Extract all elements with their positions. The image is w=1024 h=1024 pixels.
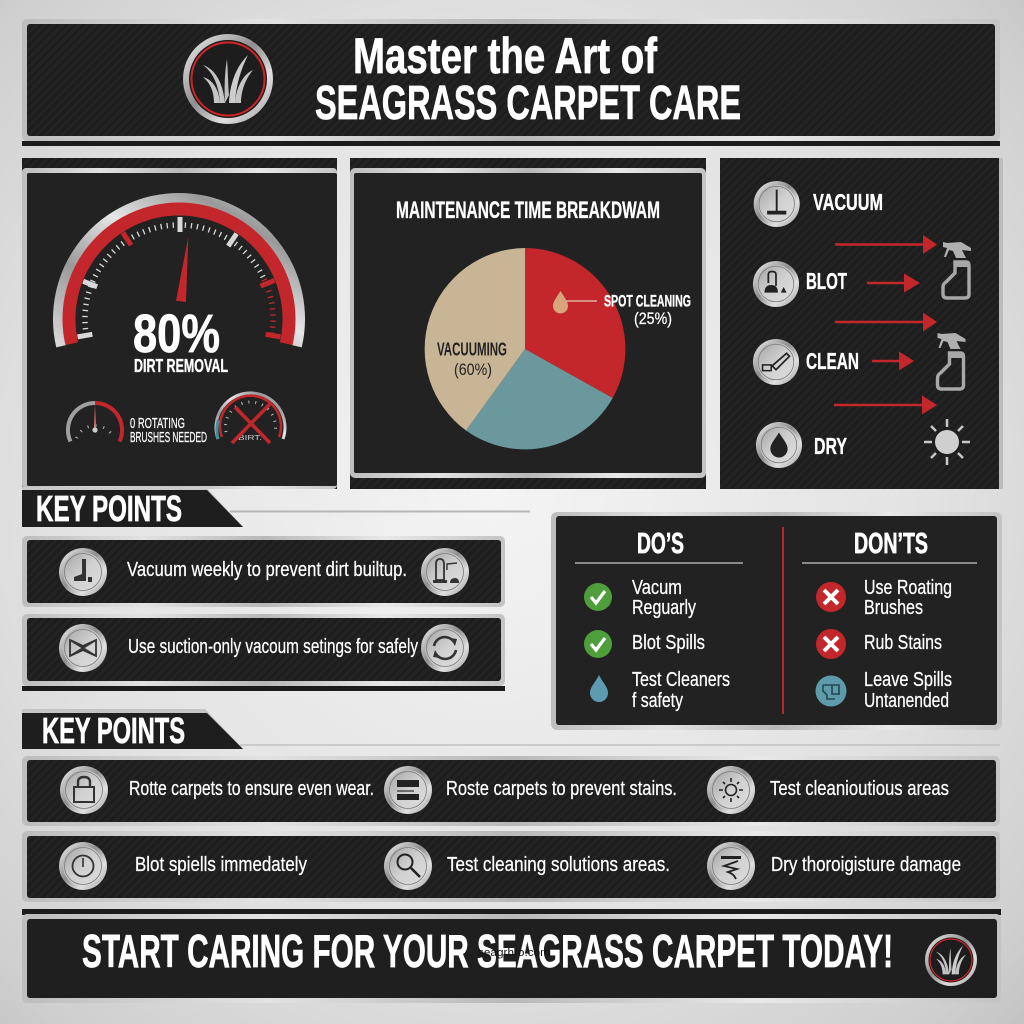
panel: do's and don'ts: [551, 512, 1002, 730]
item: vacuum regularly: [632, 577, 696, 619]
label: spot cleaning: (25%): [634, 309, 672, 328]
item: test cleaners: f safety: [632, 690, 683, 712]
step: dry: DRY: [814, 433, 847, 459]
step: dry: [756, 422, 847, 468]
arrow 2: [867, 274, 920, 292]
pie chart: [425, 248, 625, 449]
step: blot: [753, 261, 847, 307]
icon: weight lock: [60, 766, 108, 814]
text: dry thoroughly: Dry thoroigisture damage: [771, 854, 961, 876]
do's heading: DO’S: [637, 528, 684, 560]
text: Use suction-only vacoum setings for safely: [128, 636, 418, 658]
icon: teal badge: [816, 676, 846, 706]
do's column: [575, 528, 743, 712]
item: rub stains: Rub Stains: [864, 632, 942, 654]
icon: cross 1: [816, 582, 846, 612]
icon: crossed box: [59, 624, 107, 672]
label: vacuuming: [437, 340, 507, 379]
step: clean: [753, 339, 859, 385]
icon: spray bottle 2: [938, 333, 966, 389]
icon: water drop with leader line: [553, 291, 597, 314]
step: vacuum: [754, 181, 883, 227]
icon: check 2: [584, 630, 612, 658]
chart title: MAINTENANCE TIME BREAKDWAM: [396, 197, 660, 224]
icon: canister vacuum: [421, 548, 469, 596]
arrow 3: [835, 312, 937, 332]
item: vacuum regularly: Vacum: [632, 577, 682, 599]
panel: maintenance time pie chart: [350, 158, 706, 489]
call to action banner: [22, 909, 1001, 1003]
row: blot and dry tips: [22, 831, 1000, 902]
heading: key points 2: KEY POINTS: [42, 710, 185, 751]
label: spot cleaning: SPOT CLEANING: [604, 292, 691, 310]
text: prevent stains: Roste carpets to prevent stains.: [446, 778, 677, 800]
item: leave spills: Untanended: [864, 690, 949, 712]
gauge value: 80%: [133, 304, 220, 364]
icon: carpet layers: [384, 766, 432, 814]
item: rotating brushes: [864, 577, 952, 619]
arrow 4: [872, 352, 914, 370]
label: vacuuming: VACUUMING: [437, 340, 507, 360]
small gauge caption: [130, 416, 207, 446]
header banner: [22, 19, 1000, 146]
heading: key points 1: [22, 486, 530, 529]
icon: check 1: [584, 583, 612, 611]
title: SEAGRASS CARPET CARE: [315, 77, 741, 130]
panel: dirt removal gauge: [22, 158, 337, 489]
icon: small sun: [707, 766, 755, 814]
chart: crossed-out dirt gauge: [216, 393, 285, 443]
row: rotate and test tips: [22, 756, 1000, 826]
icon: moisture squiggle: [707, 842, 755, 890]
label: vacuuming: (60%): [454, 360, 492, 379]
item: leave spills: [864, 669, 952, 712]
text: Vacuum weekly to prevent dirt builtup.: [127, 559, 407, 581]
item: test cleaners: [632, 669, 730, 712]
icon: spray bottle 1: [943, 242, 971, 298]
item: leave spills: Leave Spills: [864, 669, 952, 691]
item: vacuum regularly: Reguarly: [632, 597, 696, 619]
red divider: [782, 527, 784, 714]
heading: key points 2: [22, 709, 1000, 751]
arrow 5: [834, 396, 937, 414]
icon: small seagrass logo: [925, 934, 977, 986]
heading: key points 1: KEY POINTS: [36, 488, 182, 529]
don'ts column: [802, 528, 977, 712]
chart: crossed-out dirt gauge: BIRT.: [238, 435, 262, 442]
item: rotating brushes: Use Roating: [864, 577, 952, 599]
item: test cleaners: Test Cleaners: [632, 669, 730, 691]
row: vacuum weekly: [22, 536, 505, 607]
text: blot spills: Blot spiells immedately: [135, 854, 307, 876]
icon: cross 2: [816, 629, 846, 659]
icon: seagrass logo: [183, 34, 273, 124]
title: Master the Art of: [353, 28, 657, 84]
icon: upright vacuum: [59, 548, 107, 596]
watermark text: seagrhro.com: [478, 947, 550, 959]
step: blot: BLOT: [806, 268, 847, 294]
chart: main gauge: [58, 198, 300, 346]
small gauge caption: 0 ROTATING: [130, 416, 185, 432]
arrow 1: [835, 235, 937, 254]
text: test solutions: Test cleaning solutions areas.: [447, 854, 670, 876]
icon: rotate arrows: [421, 624, 469, 672]
row: suction-only: [22, 614, 505, 691]
gauge label: DIRT REMOVAL: [134, 356, 228, 376]
text: rotate even wear: Rotte carpets to ensure even wear.: [129, 778, 374, 800]
step: clean: CLEAN: [806, 348, 859, 374]
item: blot spills: Blot Spills: [632, 632, 705, 654]
step: vacuum: VACUUM: [813, 189, 883, 215]
small gauge caption: BRUSHES NEEDED: [130, 430, 207, 446]
panel: process steps: [720, 158, 1003, 489]
icon: magnifier: [384, 842, 432, 890]
icon: sun: [924, 419, 970, 465]
label: spot cleaning: [604, 292, 691, 328]
don'ts heading: DON’TS: [854, 528, 928, 560]
title: [315, 28, 741, 130]
item: rotating brushes: Brushes: [864, 597, 923, 619]
icon: clock: [59, 842, 107, 890]
chart: small rotating brushes gauge: [68, 403, 122, 442]
icon: water drop: [590, 675, 608, 702]
text: test cautious areas: Test cleanioutious areas: [770, 778, 949, 800]
